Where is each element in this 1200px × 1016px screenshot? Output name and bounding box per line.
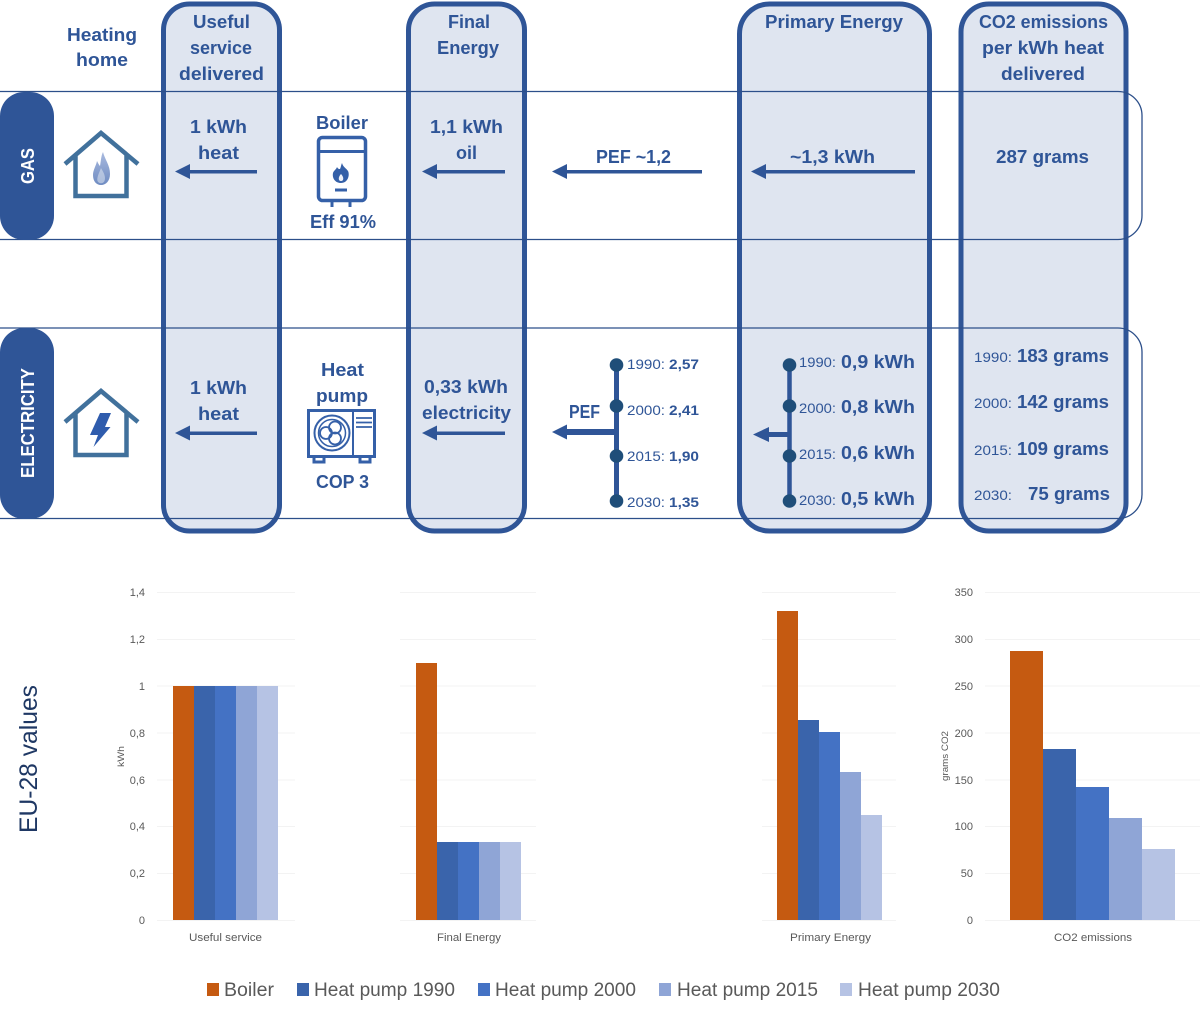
text: 1 kWh heat gas: heat [198, 142, 239, 163]
text: COP 3: COP 3 [316, 471, 369, 492]
text: 1,1 kWh oil: 1,1 kWh [430, 116, 503, 137]
heading: primary energy: Primary Energy [765, 11, 904, 32]
text: 1 kWh heat electricity: heat [198, 403, 239, 424]
heading: CO2 emissions per kWh heat delivered: delivered [1001, 63, 1085, 84]
text: 1 kWh heat gas: 1 kWh [190, 116, 247, 137]
chart: primary energy timeline: 0,6 kWh [841, 442, 915, 463]
text: CO2 emissions by year: 2030: [974, 487, 1012, 503]
chart: CO2 emissions: 50 [961, 868, 973, 880]
chart: useful service: 0,4 [130, 821, 145, 833]
chart: useful service: 0,2 [130, 868, 145, 880]
text: heat pump label [316, 359, 368, 406]
icon: heat pump [308, 410, 374, 462]
chart: CO2 emissions: 250 [955, 681, 973, 693]
text: CO2 emissions by year: 1990: [974, 349, 1012, 365]
text: 0,33 kWh electricity [422, 376, 512, 423]
chart: useful service: Useful service [189, 932, 262, 944]
chart: primary energy timeline: 2000: [799, 400, 836, 416]
chart: PEF timeline: 1,35 [669, 494, 699, 510]
icon: boiler [318, 138, 366, 207]
text: 0,33 kWh electricity: electricity [422, 402, 512, 423]
text: heat pump label: Heat [321, 359, 364, 380]
text: boiler label: Boiler [316, 112, 368, 133]
text: 1,1 kWh oil: oil [456, 142, 477, 163]
arrow: useful service gas [175, 164, 257, 179]
text: CO2 emissions by year [974, 345, 1110, 504]
arrow: final energy gas [422, 164, 505, 179]
heading: useful service delivered: service [190, 37, 252, 58]
arrow: useful service electricity [175, 426, 257, 440]
text: CO2 emissions by year: 183 grams [1017, 345, 1109, 366]
heading: CO2 emissions per kWh heat delivered: per kWh heat [982, 37, 1104, 58]
heading: final energy [437, 11, 500, 58]
panel: gas row outline [0, 92, 1142, 240]
chart: CO2 emissions: 350 [955, 587, 973, 599]
arrow: PEF gas [552, 164, 702, 179]
heading: heating home: home [76, 49, 128, 70]
chart: useful service: 0,6 [130, 775, 145, 787]
chart: primary energy timeline: 0,8 kWh [841, 396, 915, 417]
arrow: primary energy gas [751, 164, 915, 179]
heading: final energy: Final [448, 11, 490, 32]
heading: heating home: Heating [67, 24, 137, 45]
chart: primary energy timeline: 1990: [799, 354, 836, 370]
legend [207, 980, 1000, 1001]
chart: primary energy timeline [753, 351, 915, 509]
row label: ELECTRICITY: ELECTRICITY [18, 368, 38, 478]
panel: primary energy column [740, 4, 930, 531]
heading: final energy: Energy [437, 37, 500, 58]
legend: Heat pump 1990 [314, 980, 455, 1001]
icon: house with lightning bolt [65, 391, 138, 455]
chart: CO2 emissions: 100 [955, 821, 973, 833]
legend: Heat pump 2030 [858, 980, 1000, 1001]
chart: useful service: 1,4 [130, 587, 145, 599]
chart: primary energy timeline: 0,5 kWh [841, 488, 915, 509]
text: CO2 emissions by year: 2000: [974, 395, 1012, 411]
chart: final energy: Final Energy [437, 932, 502, 944]
heading: heating home [67, 24, 137, 70]
chart: useful service: 0 [139, 915, 145, 927]
text: 1,1 kWh oil [430, 116, 503, 163]
row label: GAS: GAS [18, 148, 38, 184]
text: 1 kWh heat electricity: 1 kWh [190, 377, 247, 398]
heading: useful service delivered: delivered [179, 63, 264, 84]
chart: primary energy [762, 592, 896, 944]
panel: useful service column [164, 4, 280, 531]
chart: useful service [116, 587, 295, 944]
chart: CO2 emissions: 0 [967, 915, 973, 927]
text: CO2 emissions by year: 75 grams [1028, 483, 1110, 504]
text: 0,33 kWh electricity: 0,33 kWh [424, 376, 508, 397]
row label: GAS [0, 92, 54, 240]
text: 287 grams: 287 grams [996, 146, 1089, 167]
heading: CO2 emissions per kWh heat delivered [979, 11, 1108, 84]
panel: final energy column [408, 4, 524, 531]
chart: CO2 emissions: 150 [955, 775, 973, 787]
chart: useful service: 1 [139, 681, 145, 693]
icon: house with flame [65, 133, 138, 196]
chart: CO2 emissions: grams CO2 [940, 731, 950, 781]
text: 1 kWh heat electricity [190, 377, 247, 424]
chart: PEF timeline: 2000: [627, 402, 665, 418]
text: CO2 emissions by year: 2015: [974, 442, 1012, 458]
heading: CO2 emissions per kWh heat delivered: CO2 emissions [979, 11, 1108, 32]
chart: CO2 emissions [940, 587, 1200, 944]
heading: useful service delivered: Useful [193, 11, 250, 32]
chart: primary energy timeline: 2030: [799, 492, 836, 508]
legend: Heat pump 2015 [677, 980, 818, 1001]
chart: PEF timeline: 2,57 [669, 356, 699, 372]
chart: PEF timeline: 2015: [627, 448, 665, 464]
chart: useful service: 1,2 [130, 634, 145, 646]
chart: PEF timeline: 1990: [627, 356, 665, 372]
chart: PEF timeline: 2030: [627, 494, 665, 510]
text: primary energy gas: ~1,3 kWh [790, 146, 875, 167]
row label: ELECTRICITY [0, 328, 54, 519]
legend: Heat pump 2000 [495, 980, 636, 1001]
arrow: final energy electricity [422, 426, 505, 440]
chart: PEF timeline: 2,41 [669, 402, 699, 418]
chart: useful service: 0,8 [130, 728, 145, 740]
chart: primary energy: Primary Energy [790, 932, 872, 944]
chart: primary energy timeline: 0,9 kWh [841, 351, 915, 372]
chart: final energy [400, 592, 536, 944]
chart: PEF timeline [552, 356, 699, 510]
text: 1 kWh heat gas [190, 116, 247, 163]
text: boiler efficiency: Eff 91% [310, 211, 376, 232]
heading: useful service delivered [179, 11, 264, 84]
panel: electricity row outline [0, 328, 1142, 518]
chart: PEF timeline: 1,90 [669, 448, 699, 464]
text: CO2 emissions by year: 109 grams [1017, 438, 1109, 459]
chart: CO2 emissions: 300 [955, 634, 973, 646]
chart: CO2 emissions: CO2 emissions [1054, 932, 1133, 944]
text: heat pump label: pump [316, 385, 368, 406]
chart: primary energy timeline: 2015: [799, 446, 836, 462]
text: PEF gas: PEF ~1,2 [596, 146, 671, 167]
chart: useful service: kWh [116, 746, 126, 767]
text: CO2 emissions by year: 142 grams [1017, 391, 1109, 412]
legend: Boiler [224, 980, 275, 1001]
text: EU-28 values: EU-28 values [15, 685, 43, 833]
chart: CO2 emissions: 200 [955, 728, 973, 740]
panel: CO2 emissions column [961, 4, 1126, 531]
text: PEF electricity: PEF [569, 401, 600, 422]
